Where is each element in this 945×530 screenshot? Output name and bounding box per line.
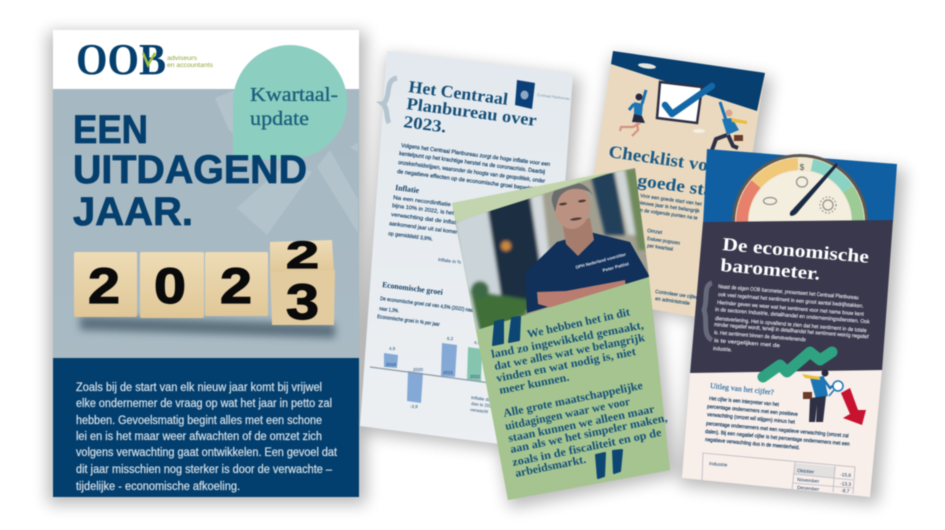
- section: Inflatie: verwachting dat de inflatie: [391, 212, 461, 227]
- heading: De economische barometer: De economische: [722, 235, 870, 268]
- checklist body text: en administratie: [655, 296, 690, 307]
- logo: OOB: en accountants: [167, 63, 213, 69]
- panel: checklist page: [575, 51, 765, 322]
- checklist body text: Evalueer prognoses: [647, 236, 681, 247]
- panel: barometer page: [682, 149, 897, 497]
- section: Economische groei: naar 1,3%.: [379, 306, 399, 315]
- bar chart: economic growth: 6,2: [447, 336, 454, 341]
- speech bubble: Kwartaal-update: [233, 45, 347, 159]
- body text on dark panel: [713, 284, 870, 354]
- quote text: staan kunnen we alleen maar: [507, 403, 656, 445]
- cover navy text panel: tijdelijke - economische afkoeling.: [76, 481, 240, 493]
- checklist body text: om de volgende punten na te: [636, 207, 698, 222]
- checklist body text: Voor een goede start van het: [640, 193, 703, 208]
- wooden cubes: 2023: 3: [286, 274, 319, 330]
- section: Economische groei: Economische groei: [382, 280, 444, 297]
- photo: portrait of man: [455, 168, 650, 340]
- close quote mark: [596, 450, 622, 478]
- wooden cubes: 2023: 2: [286, 235, 319, 277]
- dark panel: [690, 220, 893, 374]
- man: [525, 182, 650, 313]
- body text on dark panel: minder negatief wordt, terwijl in detailhandel het sentiment weinig negatief: [714, 322, 869, 340]
- heading: De economische barometer: [720, 235, 870, 285]
- intro text: onzekerheidsrijpen, waaronder de hoogte van de geopolitiek, onder: [398, 160, 545, 185]
- heading: uitleg van het cijfer: Uitleg van het cijfer?: [710, 381, 775, 397]
- body text on pink panel: negatieve verwachting dus in de meerderheid.: [705, 437, 800, 451]
- icon: checked box: [657, 82, 712, 123]
- section: Inflatie: [388, 183, 463, 266]
- bar chart: economic growth: 2022: [470, 374, 481, 379]
- section: Inflatie: Inflatie: [395, 183, 420, 195]
- wooden cubes: 2023: 2: [220, 258, 252, 314]
- table: sector sentiment: December: [797, 485, 820, 493]
- section: Inflatie: op gemiddeld 3,9%.: [388, 231, 433, 243]
- checklist body text: [636, 193, 703, 307]
- paper shapes in background: [215, 90, 358, 235]
- checklist body text: per kwartaal: [647, 243, 673, 253]
- panel: Centraal Planbureau page: [360, 51, 573, 450]
- quote text: meer kunnen.: [498, 372, 570, 397]
- intro text: kentelpunt op het krachtige herstel na de coronacrisis. Daarbij: [399, 151, 545, 176]
- bar chart: economic growth: 2020: [413, 367, 424, 372]
- heading: Checklist voor een goede start: een goede start: [603, 165, 730, 202]
- heading: Checklist voor een goede start: [603, 141, 759, 202]
- navy top band: [611, 51, 765, 111]
- title: een uitdagend jaar: [73, 108, 307, 234]
- panel: cover page: [53, 30, 359, 497]
- bar chart: economic growth: 4,9: [389, 346, 396, 351]
- green lower block over photo: [477, 277, 670, 500]
- cover photo background: [53, 89, 359, 359]
- cover navy text panel: dit jaar misschien nog sterker is door de verwachte –: [76, 464, 333, 476]
- panel: quote page: [452, 168, 670, 500]
- section: Inflatie: Inflatie in %: [438, 257, 462, 266]
- quote text: We hebben het in dit: [526, 306, 631, 341]
- bar chart: economic growth: 2021: [443, 370, 454, 375]
- page paper: [360, 51, 573, 450]
- quote text: uitdagingen waar we voor: [504, 396, 631, 433]
- quote text: arbeidsmarkt.: [514, 454, 587, 480]
- heading: Het Centraal Planbureau over 2023: Planbureau over: [405, 94, 538, 130]
- body text on pink panel: Het cijfer is een interpreter van het: [709, 396, 780, 408]
- body text on dark panel: dienstverlening. Het is opvallend te zien dat het sentiment in de totale: [715, 316, 867, 334]
- body text on pink panel: percentage ondernemers met een positieve: [707, 404, 798, 418]
- body text on dark panel: Naast de eigen OOB barometer, presenteert het Centraal Planbureau: [718, 284, 859, 301]
- wooden cubes: 2023: [74, 235, 335, 338]
- table: sector sentiment: -15,6: [840, 472, 852, 479]
- body text on pink panel: [705, 396, 850, 451]
- heading: De economische barometer: barometer.: [720, 256, 821, 285]
- blue top band: [703, 149, 897, 224]
- logo: Rijksoverheid: [515, 80, 570, 109]
- cover navy text panel: hebben. Gevoelsmatig begint alles met een schone: [76, 415, 322, 427]
- section: Economische groei: [377, 280, 475, 328]
- intro text: de negatieve effecten op de economische groei beperkt blijven.: [397, 169, 552, 195]
- intro text: Volgens het Centraal Planbureau zorgt de hoge inflatie voor een: [401, 143, 550, 168]
- cover navy text panel: volgens verwachting gaat ontwikkelen. Een gevoel dat: [76, 447, 338, 459]
- section: Economische groei: De economische groei zal van 4,5% (2022) naar: [380, 296, 475, 314]
- cover navy text panel: lei en is het maar weer afwachten of de omzet zich: [76, 431, 322, 443]
- quote text: Alle grote maatschappelijke: [502, 380, 644, 420]
- chart: barometer gauge: $: [800, 163, 805, 172]
- logo: OOB: adviseurs: [167, 56, 197, 62]
- intro text: [397, 143, 552, 195]
- page paper: [575, 51, 765, 322]
- table: sector sentiment: [702, 453, 855, 495]
- heading: Het Centraal Planbureau over 2023: 2023.: [402, 112, 448, 137]
- cover navy text panel: elke ondernemer de vraag op wat het jaar in petto zal: [76, 398, 332, 410]
- section: Inflatie: Na een recordinflatie van: [393, 195, 463, 210]
- table: sector sentiment: Oktober: [797, 468, 815, 476]
- bar chart: economic growth: [370, 336, 495, 414]
- wooden cubes: 2023: 0: [154, 258, 186, 314]
- body text on pink panel: dalen). Bij een negatief cijfer is het percentage ondernemers met een: [705, 429, 850, 448]
- man: Peter Pattist: [602, 261, 630, 273]
- title: een uitdagend jaar: EEN: [73, 108, 148, 152]
- bar chart: economic growth: Inflatie door: [471, 395, 495, 403]
- checklist body text: nieuwe jaar is het belangrijk: [638, 200, 700, 215]
- bar chart: economic growth: 2019: [386, 362, 397, 367]
- logo: Rijksoverheid: Centraal Planbureau: [537, 93, 570, 101]
- decorative brace: [383, 78, 397, 123]
- cover navy text panel: [53, 358, 359, 497]
- title: een uitdagend jaar: UITDAGEND: [73, 148, 307, 192]
- quote text: zoals in de fiscaliteit en op de: [511, 427, 663, 469]
- body text on pink panel: percentage ondernemers met een negatieve verwachting (omzet zal: [706, 421, 849, 439]
- icon: green zigzag arrow: [763, 352, 832, 377]
- body text on dark panel: Hierinder geven we weer wat het sentiment voor met name bouw kent: [717, 300, 864, 318]
- checklist body text: Controleer uw cijfers: [655, 289, 701, 301]
- table: sector sentiment: November: [797, 477, 820, 485]
- cloud: [638, 62, 656, 70]
- bar chart: economic growth: -3,9: [410, 404, 418, 409]
- bar chart: economic growth: dan in 2022: [471, 401, 495, 409]
- heading: Checklist voor een goede start: Checklist voor een: [607, 141, 759, 182]
- table: sector sentiment: -8,7: [841, 488, 850, 495]
- body text on pink panel: verwachting (omzet wil stijgen) minus het: [707, 412, 795, 426]
- illustration: running businessman: [712, 102, 747, 150]
- body text on dark panel: ook veel regelmaat het sentiment in een groot aantal bedrijfstakken.: [718, 292, 864, 310]
- heading: Het Centraal Planbureau over 2023: Het Centraal: [407, 77, 509, 109]
- illustration: man with magnifying glass: [802, 370, 843, 422]
- title: een uitdagend jaar: JAAR.: [73, 190, 193, 234]
- table: sector sentiment: Industrie: [709, 461, 728, 469]
- section: Inflatie: aankomend jaar uit zal komen: [389, 221, 459, 236]
- table: sector sentiment: -13,3: [840, 481, 852, 488]
- bar chart: economic growth: 4,5: [474, 340, 481, 345]
- needle: [793, 163, 838, 213]
- bar chart: economic growth: verwacht: [470, 407, 489, 414]
- logo: OOB: OOB: [76, 35, 166, 84]
- illustration: jumping woman: [620, 90, 646, 136]
- quote text: land zo ingewikkeld gemaakt,: [490, 320, 645, 361]
- chart: barometer gauge: [732, 154, 868, 290]
- man: OPH Nederland voorzitter: [575, 252, 627, 270]
- speech bubble: Kwartaal-update: update: [250, 108, 309, 130]
- pink panel: [682, 370, 882, 497]
- quote text: [490, 306, 669, 480]
- body text on dark panel: industrie.: [713, 346, 732, 354]
- quote text: vinden en wat nodig is, niet: [495, 346, 637, 385]
- wooden cubes: 2023: 2: [88, 258, 120, 314]
- open quote mark: [493, 317, 520, 345]
- body text on dark panel: is. Het sentiment binnen de dienstverlenende: [714, 330, 806, 343]
- weather icons: [764, 177, 836, 213]
- section: Economische groei: Economische groei in % per jaar: [377, 314, 440, 328]
- speech bubble: Kwartaal-update: Kwartaal-: [250, 84, 338, 106]
- quote text: dat we alles wat we belangrijk: [493, 332, 646, 373]
- cover navy text panel: Zoals bij de start van elk nieuw jaar komt bij vrijwel: [76, 382, 322, 394]
- top green wedge: [452, 172, 610, 222]
- heading: Het Centraal Planbureau over 2023: [402, 77, 538, 137]
- body text on dark panel: is te vergelijken met de: [714, 338, 780, 349]
- checklist body text: Omzet: [647, 228, 663, 236]
- cloud small: [693, 129, 705, 133]
- quote text: aan als we het simpeler maken,: [509, 412, 669, 456]
- section: Inflatie: bijna 10% in 2022, is het de: [392, 203, 462, 218]
- decorative brace: [704, 283, 712, 340]
- cover white header: [53, 30, 359, 90]
- body text on dark panel: in de sectoren Industrie, detailhandel en ondernemingsdiensten. Ook: [715, 307, 870, 325]
- green page: [452, 168, 670, 500]
- icon: red down arrow: [841, 388, 866, 425]
